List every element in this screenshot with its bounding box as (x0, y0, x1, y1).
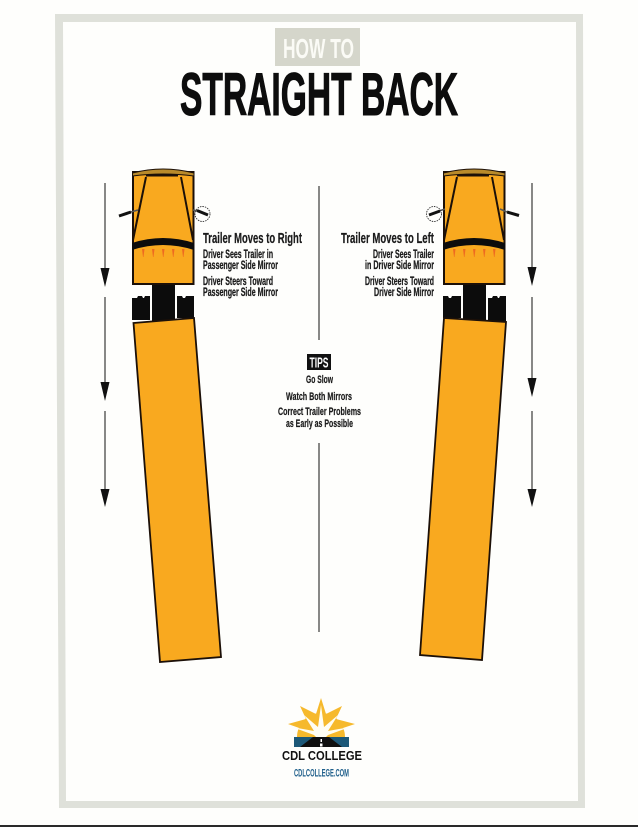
center divider (318, 186, 320, 632)
logo (282, 698, 362, 780)
left mirrors (119, 206, 210, 222)
left caption: Passenger Side Mirror (203, 287, 278, 299)
left caption (203, 230, 302, 299)
left tractor chassis and wheels (132, 284, 194, 322)
left caption: Trailer Moves to Right (203, 230, 302, 247)
right caption: Driver Steers Toward (365, 276, 434, 288)
left direction arrows (100, 183, 110, 507)
right caption: Driver Sees Trailer (373, 249, 434, 261)
tips list: as Early as Possible (286, 418, 353, 430)
tips badge: TIPS (310, 354, 328, 372)
logo sun (288, 698, 355, 737)
right caption: in Driver Side Mirror (365, 260, 434, 272)
left trailer (134, 318, 221, 662)
page frame (55, 14, 585, 808)
right caption: Driver Side Mirror (374, 287, 434, 299)
right mirrors (426, 206, 519, 222)
right truck (420, 169, 519, 660)
right caption (341, 230, 434, 299)
tips (278, 354, 361, 430)
logo wordmark: CDL COLLEGE (282, 749, 362, 763)
right cab marker lights (453, 249, 496, 257)
tips list: Correct Trailer Problems (278, 406, 361, 418)
left cab marker lights (142, 249, 184, 257)
tips list: Watch Both Mirrors (286, 391, 352, 403)
left caption: Passenger Side Mirror (203, 260, 278, 272)
right cab (443, 169, 505, 284)
left cab (132, 169, 194, 284)
right trailer (420, 318, 506, 660)
right caption: Trailer Moves to Left (341, 230, 434, 247)
left caption: Driver Steers Toward (203, 276, 273, 288)
tips list: Go Slow (306, 374, 333, 386)
heading: how to (275, 28, 360, 66)
left truck (119, 169, 221, 662)
tips list (278, 374, 361, 430)
left caption: Driver Sees Trailer in (203, 249, 273, 261)
heading: how to: HOW TO (283, 33, 354, 64)
logo road band (294, 737, 349, 747)
right tractor chassis and wheels (443, 284, 506, 322)
logo url: CDLCOLLEGE.COM (294, 768, 349, 780)
right direction arrows (528, 183, 536, 507)
